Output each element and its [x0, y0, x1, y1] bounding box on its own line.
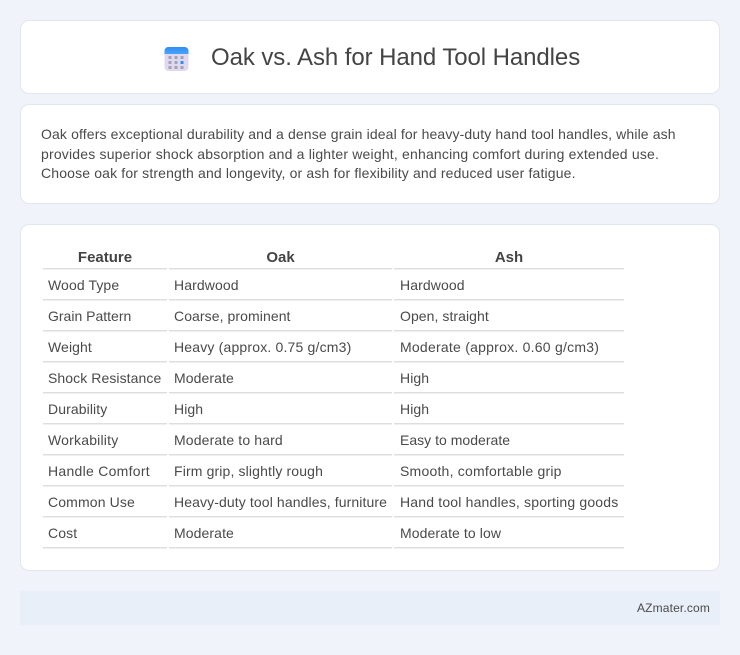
row: Cost: Moderate to low [400, 525, 501, 541]
row: Cost: Moderate [174, 525, 234, 541]
table header: Ash [495, 249, 523, 266]
summary text: provides superior shock absorption and a lighter weight, enhancing comfort during extended use. [41, 146, 659, 162]
title: Oak vs. Ash for Hand Tool Handles [211, 44, 580, 71]
row: Handle Comfort: Handle Comfort [48, 463, 150, 479]
row: Durability [48, 401, 429, 417]
row: Durability: High [174, 401, 203, 417]
row: Wood Type: Hardwood [174, 277, 239, 293]
footer bar [20, 591, 720, 625]
row: Workability [48, 432, 510, 448]
row: Weight [48, 339, 599, 355]
panel: title header [20, 20, 720, 94]
row: Common Use: Common Use [48, 494, 135, 510]
row: Weight: Weight [48, 339, 92, 355]
row: Workability: Moderate to hard [174, 432, 283, 448]
table header: Feature [78, 249, 132, 266]
row: Durability: High [400, 401, 429, 417]
row: Weight: Heavy (approx. 0.75 g/cm3) [174, 339, 351, 355]
table header: Oak [266, 249, 295, 266]
row: Cost [48, 525, 501, 541]
row: Workability: Workability [48, 432, 118, 448]
row: Grain Pattern: Coarse, prominent [174, 308, 291, 324]
row: Shock Resistance: Moderate [174, 370, 234, 386]
row: Common Use [48, 494, 618, 510]
row: Handle Comfort: Firm grip, slightly rough [174, 463, 323, 479]
row: Wood Type: Wood Type [48, 277, 119, 293]
row: Grain Pattern: Open, straight [400, 308, 489, 324]
row: Weight: Moderate (approx. 0.60 g/cm3) [400, 339, 599, 355]
row: Grain Pattern: Grain Pattern [48, 308, 131, 324]
row: Shock Resistance: Shock Resistance [48, 370, 161, 386]
row: Wood Type [48, 277, 465, 293]
row: Wood Type: Hardwood [400, 277, 465, 293]
row: Shock Resistance: High [400, 370, 429, 386]
row: Durability: Durability [48, 401, 107, 417]
row: Cost: Cost [48, 525, 77, 541]
summary text: Choose oak for strength and longevity, or ash for flexibility and reduced user fatigue. [41, 165, 576, 181]
row: Grain Pattern [48, 308, 489, 324]
summary text [41, 126, 676, 181]
icon: calendar [164, 47, 188, 71]
summary text: Oak offers exceptional durability and a dense grain ideal for heavy-duty hand tool handles, while ash [41, 126, 676, 142]
panel: comparison table [20, 224, 720, 571]
footer credit: AZmater.com [637, 601, 710, 615]
row: Common Use: Hand tool handles, sporting goods [400, 494, 618, 510]
table header [78, 249, 523, 266]
row: Shock Resistance [48, 370, 429, 386]
row: Handle Comfort [48, 463, 562, 479]
row: Common Use: Heavy-duty tool handles, furniture [174, 494, 387, 510]
row: Handle Comfort: Smooth, comfortable grip [400, 463, 562, 479]
panel: summary [20, 104, 720, 204]
row: Workability: Easy to moderate [400, 432, 510, 448]
